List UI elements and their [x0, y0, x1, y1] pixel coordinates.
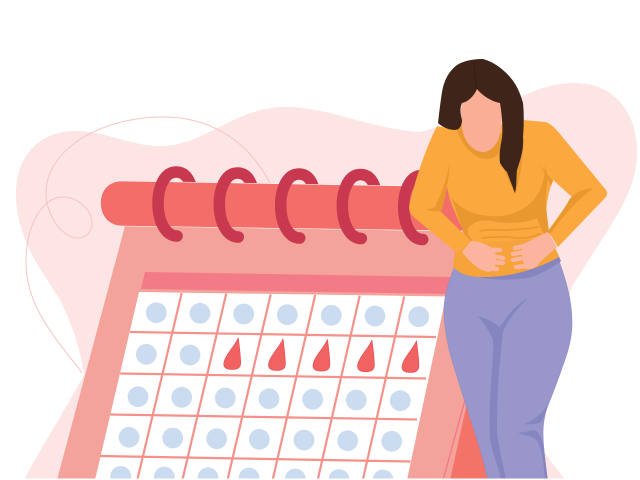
knee wrinkles — [518, 405, 548, 480]
belly fold lines — [480, 227, 540, 238]
collar shadow — [456, 124, 502, 159]
row 1 dots — [146, 302, 429, 327]
calendar header band — [141, 272, 452, 294]
sweater torso — [445, 122, 559, 277]
right arm — [523, 120, 607, 247]
blood drop icons — [224, 338, 419, 372]
trousers — [444, 252, 572, 480]
spiral rings, back halves — [156, 166, 420, 186]
row 2 dots — [136, 344, 200, 365]
face — [461, 86, 502, 152]
calendar back page — [442, 403, 488, 478]
row 3 dots — [128, 386, 411, 411]
calendar page edge line — [443, 400, 465, 480]
calendar binding bar — [100, 181, 465, 231]
row 5 dots — [110, 466, 394, 478]
woman — [409, 59, 607, 480]
calendar grid — [95, 292, 446, 480]
left arm — [409, 126, 471, 253]
hair shadow on sweater — [504, 148, 523, 194]
row 4 dots — [119, 427, 402, 452]
right hand — [513, 232, 557, 269]
belly fold — [467, 218, 547, 244]
decorative thin looping line — [26, 117, 270, 373]
left hand — [462, 241, 503, 272]
calendar — [57, 172, 513, 480]
waistband shadow — [480, 252, 561, 280]
spiral rings, front halves — [158, 178, 423, 240]
under-bust shadow — [449, 165, 549, 243]
crotch fold shadow — [478, 298, 528, 480]
hair — [438, 59, 524, 193]
lower sweater hem — [453, 252, 559, 277]
calendar front page — [58, 226, 464, 478]
